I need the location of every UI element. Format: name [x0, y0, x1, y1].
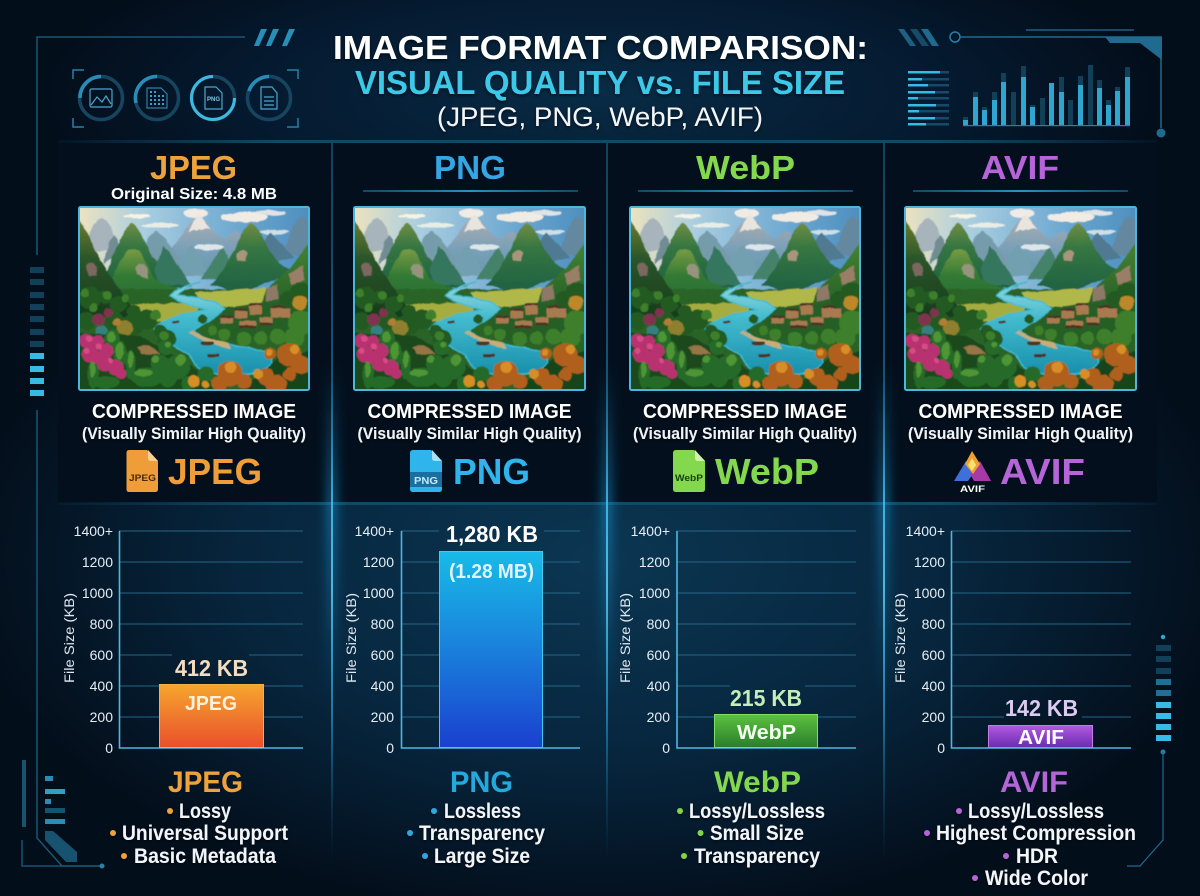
bar chart: PNG: 0: [386, 740, 394, 756]
feature list: AVIF: [924, 800, 1136, 890]
format logo: AVIF: AVIF: [960, 484, 985, 495]
title: [333, 29, 868, 132]
caption: COMPRESSED IMAGE: [92, 401, 296, 423]
caption: [82, 401, 306, 443]
bar chart: AVIF: 200: [922, 709, 945, 725]
caption: COMPRESSED IMAGE: [368, 401, 572, 423]
heading: PNG: PNG: [434, 149, 506, 186]
bar chart: PNG: File Size (KB): [343, 593, 359, 683]
heading underline: [913, 190, 1128, 192]
bar chart: PNG: 600: [371, 647, 394, 663]
caption: (Visually Similar High Quality): [358, 424, 582, 443]
bar chart: AVIF: File Size (KB): [892, 593, 908, 683]
feature list: JPEG: Lossy: [179, 800, 231, 823]
feature list: JPEG: Universal Support: [122, 822, 288, 845]
feature list: PNG: Transparency: [419, 822, 545, 845]
bar chart: JPEG: File Size (KB): [61, 593, 77, 683]
caption: [908, 401, 1133, 443]
icon: image file: [80, 76, 122, 120]
caption: COMPRESSED IMAGE: [643, 401, 847, 423]
bar chart: WebP: 200: [647, 709, 670, 725]
bar chart: AVIF: 1400+: [906, 523, 945, 539]
panel: AVIF: [892, 149, 1142, 890]
format logo: WebP: WebP: [675, 473, 704, 484]
decorative circuit: bottom right: [1127, 635, 1171, 866]
title: IMAGE FORMAT COMPARISON:: [333, 29, 868, 66]
image: WebP landscape: [624, 201, 866, 395]
bar chart: JPEG: 200: [90, 709, 113, 725]
bar chart: AVIF: AVIF: [1018, 727, 1064, 749]
bar chart: PNG: 1000: [363, 585, 394, 601]
caption: [633, 401, 857, 443]
bar chart: AVIF: 1200: [914, 554, 945, 570]
feature list: AVIF: Wide Color: [985, 867, 1088, 890]
format logo: PNG: PNG: [453, 451, 530, 492]
feature label: JPEG: JPEG: [168, 766, 243, 799]
heading underline: [363, 190, 578, 192]
bar chart: PNG: (1.28 MB): [449, 561, 534, 583]
bar chart: JPEG: 1400+: [74, 523, 113, 539]
bar chart: JPEG: JPEG: [185, 693, 237, 715]
format logo: JPEG: JPEG: [129, 473, 156, 484]
bar chart: WebP: 1400+: [631, 523, 670, 539]
bar chart: AVIF: 400: [922, 678, 945, 694]
feature label: PNG: PNG: [450, 766, 513, 799]
icon: compressed file: [135, 76, 178, 120]
format logo: PNG: [410, 450, 530, 492]
bar chart: WebP: 400: [647, 678, 670, 694]
format logo: JPEG: JPEG: [168, 451, 262, 492]
bar chart: WebP: WebP: [737, 722, 796, 744]
bar chart: WebP: 0: [662, 740, 670, 756]
caption: (Visually Similar High Quality): [82, 424, 306, 443]
format logo: JPEG: [126, 450, 262, 492]
bar chart: JPEG: 400: [90, 678, 113, 694]
bar chart: WebP: File Size (KB): [617, 593, 633, 683]
bar chart: JPEG: 0: [105, 740, 113, 756]
bar chart: AVIF: 600: [922, 647, 945, 663]
feature list: PNG: [407, 800, 545, 868]
format icons row: [73, 70, 298, 127]
panel: JPEG: [61, 149, 315, 868]
decorative level bars: left: [30, 267, 44, 396]
bar chart: PNG: 1200: [363, 554, 394, 570]
bar chart: JPEG: 1200: [82, 554, 113, 570]
heading underline: [638, 190, 853, 192]
caption: (Visually Similar High Quality): [633, 424, 857, 443]
bar chart: WebP: 600: [647, 647, 670, 663]
decorative circuit: bottom left: [22, 760, 104, 868]
feature list: AVIF: Highest Compression: [936, 822, 1136, 845]
feature list: PNG: Lossless: [444, 800, 521, 823]
format logo: AVIF: AVIF: [1000, 451, 1085, 492]
decorative tech frame: top right: [898, 29, 1166, 138]
heading: AVIF: AVIF: [981, 149, 1059, 186]
icon: PNG file: PNG: [207, 97, 220, 103]
feature list: AVIF: HDR: [1016, 845, 1058, 868]
title: (JPEG, PNG, WebP, AVIF): [437, 102, 763, 132]
original size label: Original Size: 4.8 MB: [111, 186, 277, 203]
bar chart: WebP: [617, 523, 856, 756]
bar chart: PNG: 1,280 KB: [446, 521, 538, 547]
bar chart: AVIF: 1000: [914, 585, 945, 601]
icon: PNG file: [192, 76, 234, 120]
decorative tech frame: top left: [37, 29, 295, 866]
heading: JPEG: JPEG: [150, 149, 237, 186]
bar chart: JPEG: 1000: [82, 585, 113, 601]
bar chart: JPEG: 600: [90, 647, 113, 663]
caption: [358, 401, 582, 443]
feature list: WebP: Transparency: [694, 845, 820, 868]
format logo: WebP: [673, 450, 819, 492]
feature list: WebP: [677, 800, 825, 868]
title: VISUAL QUALITY vs. FILE SIZE: [355, 64, 845, 101]
icon: document: [248, 76, 290, 120]
bar chart: WebP: 215 KB: [730, 685, 802, 711]
bar chart: PNG: [343, 521, 580, 756]
bar chart: PNG: 800: [371, 616, 394, 632]
feature list: WebP: Lossy/Lossless: [689, 800, 825, 823]
feature list: WebP: Small Size: [710, 822, 804, 845]
bar chart: JPEG: [61, 523, 303, 756]
bar chart: PNG: 200: [371, 709, 394, 725]
feature list: AVIF: Lossy/Lossless: [968, 800, 1104, 823]
bar chart: AVIF: 800: [922, 616, 945, 632]
image: AVIF landscape: [899, 201, 1142, 395]
feature label: WebP: WebP: [714, 766, 801, 799]
caption: COMPRESSED IMAGE: [918, 401, 1122, 423]
bar chart: AVIF: [892, 523, 1131, 756]
feature list: JPEG: Basic Metadata: [134, 845, 276, 868]
format logo: WebP: WebP: [715, 451, 819, 492]
caption: (Visually Similar High Quality): [908, 424, 1133, 443]
bar chart: WebP: 800: [647, 616, 670, 632]
bar chart: WebP: 1000: [639, 585, 670, 601]
feature label: AVIF: AVIF: [1000, 766, 1068, 799]
bar chart: WebP: 1200: [639, 554, 670, 570]
panel: WebP: [617, 149, 866, 868]
image: PNG landscape: [348, 201, 591, 395]
image: JPEG landscape: [73, 201, 315, 395]
feature list: JPEG: [110, 800, 288, 868]
format logo: PNG: PNG: [414, 475, 438, 487]
bar chart: PNG: 400: [371, 678, 394, 694]
panel: PNG: [343, 149, 591, 868]
bar chart: AVIF: 0: [937, 740, 945, 756]
mini bar chart decoration: [908, 65, 1130, 126]
bar chart: PNG: 1400+: [355, 523, 394, 539]
heading: WebP: WebP: [696, 149, 795, 186]
bar chart: JPEG: 412 KB: [175, 655, 248, 681]
format logo: AVIF: [954, 451, 1085, 495]
bar chart: AVIF: 142 KB: [1005, 695, 1078, 721]
feature list: PNG: Large Size: [434, 845, 530, 868]
bar chart: JPEG: 800: [90, 616, 113, 632]
